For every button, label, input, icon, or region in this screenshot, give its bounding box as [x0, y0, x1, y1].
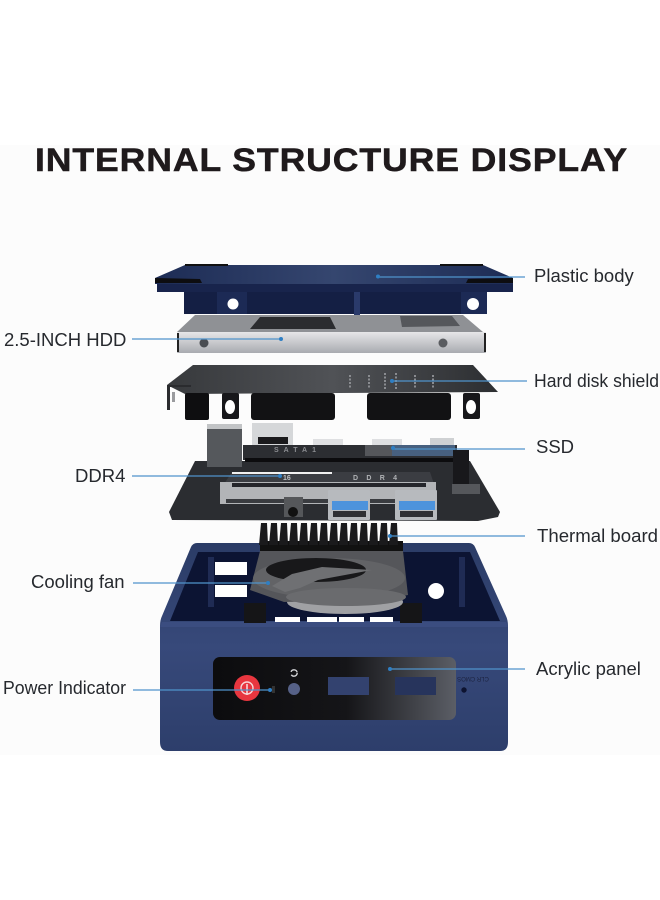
component: plastic body [155, 264, 513, 320]
label: power indicator [3, 677, 272, 698]
component: 2.5-inch HDD [177, 315, 486, 353]
label: 2.5-inch HDD [4, 329, 283, 350]
front port [328, 677, 369, 695]
label: thermal board: Thermal board [537, 525, 658, 546]
label: thermal board [388, 525, 658, 546]
component: computer case [160, 543, 508, 751]
label: cooling fan [31, 571, 270, 592]
clear CMOS label: CLR CMOS [457, 675, 489, 681]
component: acrylic front panel [213, 657, 456, 720]
label: DDR4: DDR4 [75, 465, 125, 486]
label: DDR4 [75, 465, 282, 486]
clear CMOS label [457, 675, 489, 693]
component: motherboard with SSD and DDR4: DDR4 [353, 475, 397, 482]
label: SSD: SSD [536, 436, 574, 457]
label: power indicator: Power Indicator [3, 677, 126, 698]
icon: reset button [288, 670, 300, 695]
label: SSD [391, 436, 574, 457]
label: acrylic panel [388, 658, 641, 679]
component: thermal board heat sink [259, 523, 403, 551]
label: cooling fan: Cooling fan [31, 571, 125, 592]
label: plastic body [376, 265, 634, 286]
icon: power button [234, 675, 260, 701]
label: acrylic panel: Acrylic panel [536, 658, 641, 679]
label: 2.5-inch HDD: 2.5-INCH HDD [4, 329, 126, 350]
label: hard disk shield [390, 370, 659, 391]
label: plastic body: Plastic body [534, 265, 634, 286]
component: hard disk shield [167, 365, 498, 420]
component: motherboard with SSD and DDR4: SATA1 [274, 447, 316, 454]
front port [395, 677, 436, 695]
component: motherboard with SSD and DDR4 [169, 423, 500, 521]
background band [0, 145, 660, 755]
title: INTERNAL STRUCTURE DISPLAY [35, 142, 628, 178]
component: motherboard with SSD and DDR4: 16 [283, 475, 291, 482]
component: cooling fan [244, 551, 422, 623]
icon: power indicator [272, 686, 275, 693]
